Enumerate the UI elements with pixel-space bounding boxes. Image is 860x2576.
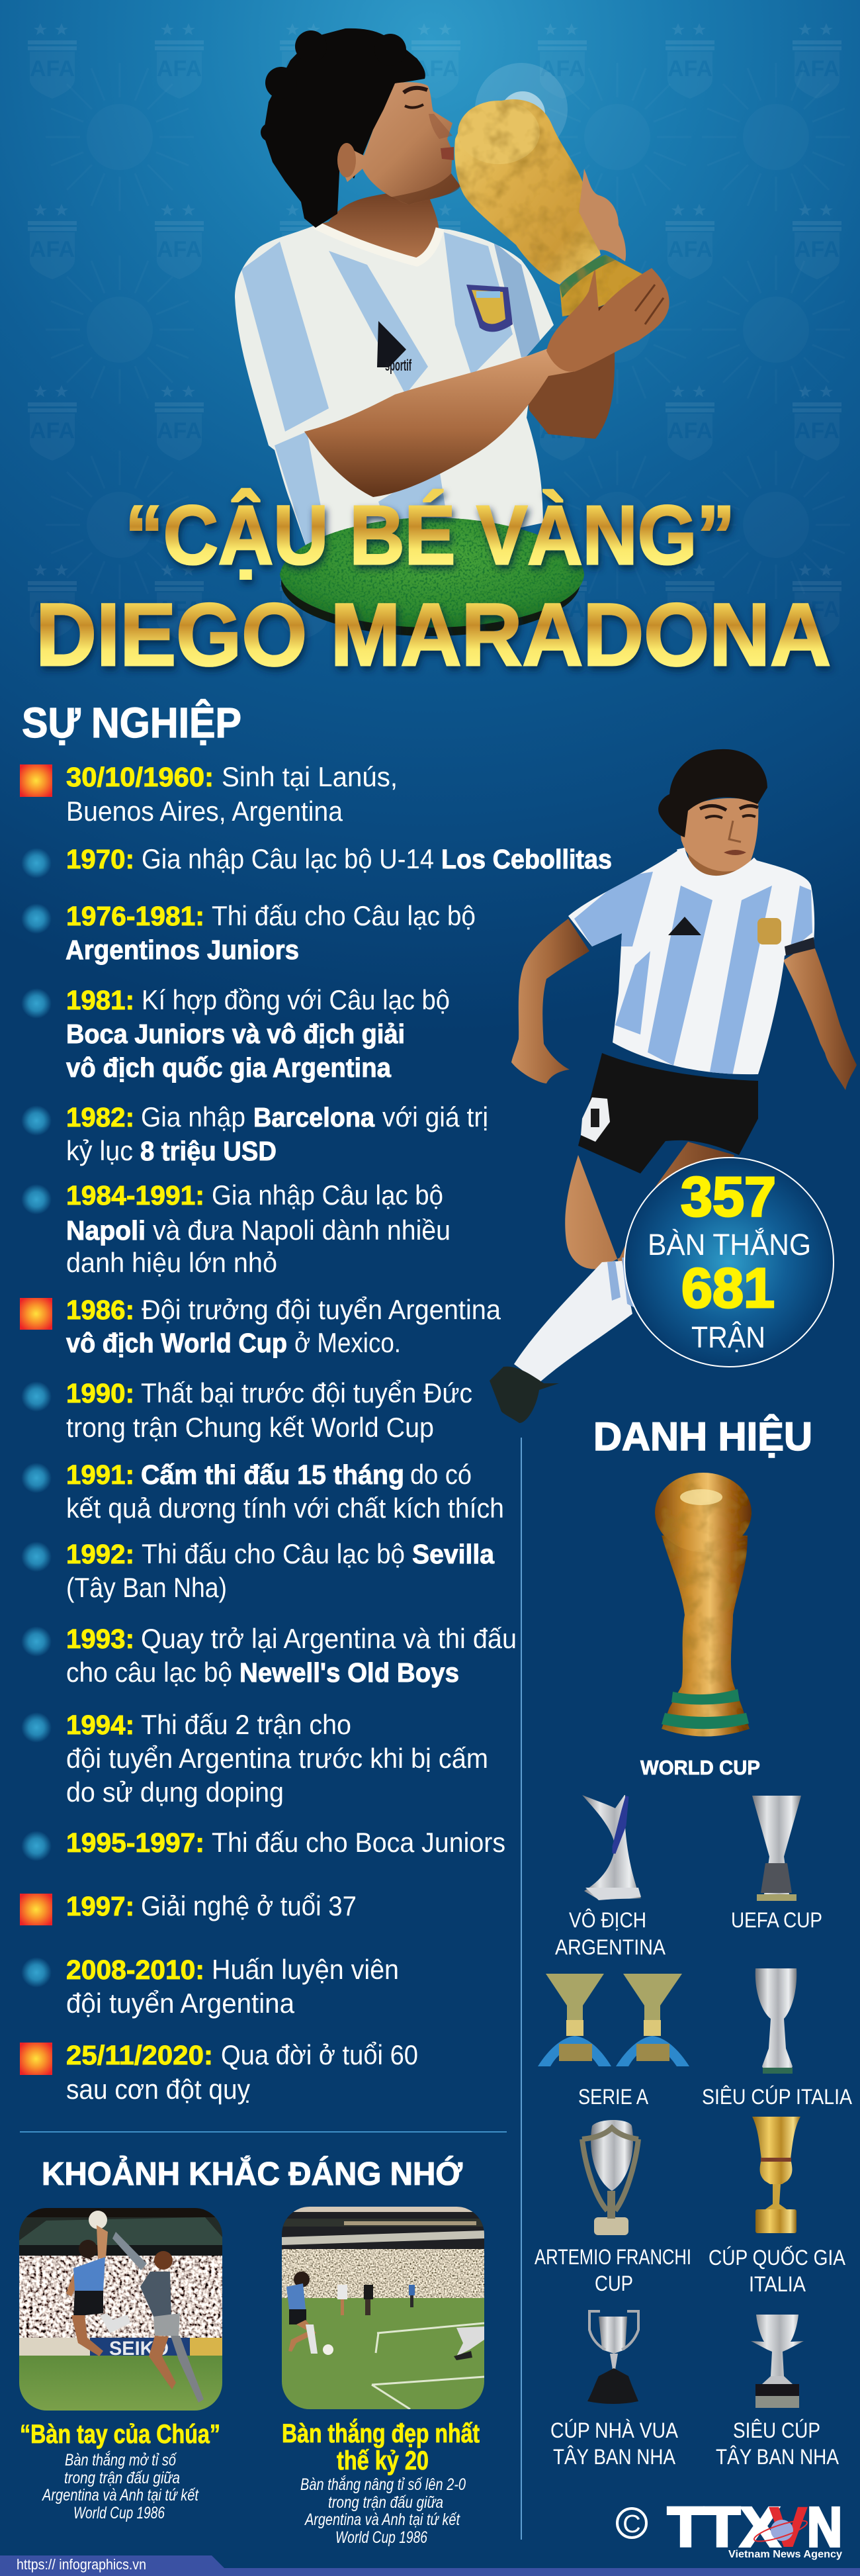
entry 1986: ở Mexico. [294, 1327, 401, 1358]
entry 1984-1991: Gia nhập Câu lạc bộ [212, 1179, 443, 1211]
entry 1995-1997 [21, 1827, 505, 1861]
entry 2020: Qua đời ở tuổi 60 [221, 2039, 418, 2070]
thigh and knee [565, 1142, 734, 1271]
entry 1982: 1982: [66, 1102, 134, 1132]
label: Artemio Franchi Cup [535, 2245, 691, 2295]
entry 1982: 8 triệu USD [140, 1136, 277, 1166]
photo: Goal of the Century [282, 2207, 484, 2409]
hand [546, 268, 669, 372]
entry 1992: Sevilla [412, 1539, 495, 1569]
entry 1970: 1970: [66, 844, 134, 874]
caption: Goal of the Century: Bàn thắng đẹp nhất [282, 2418, 480, 2448]
entry 2008-2010: Huấn luyện viên [212, 1954, 399, 1985]
entry 1993 [21, 1623, 517, 1688]
entry 1986: Đội trưởng đội tuyển Argentina [142, 1294, 501, 1325]
entry 1981: Kí hợp đồng với Câu lạc bộ [142, 984, 450, 1015]
caption: Hand of God: trong trận đấu giữa [64, 2469, 180, 2487]
entry 1994 [21, 1709, 488, 1808]
entry 1960: 30/10/1960: [66, 762, 214, 792]
entry 1976-1981: Thi đấu cho Câu lạc bộ [212, 900, 476, 931]
title: “CẬU BÉ VÀNG” [125, 488, 735, 582]
label: Artemio Franchi Cup: CUP [595, 2272, 633, 2295]
caption: Hand of God [20, 2420, 220, 2522]
le coq logo: sportif [385, 357, 412, 375]
trophy: UEFA Cup [752, 1796, 801, 1901]
face [678, 798, 758, 890]
caption: Goal of the Century: World Cup 1986 [335, 2528, 427, 2547]
trophy: Siêu cúp Italia [755, 1968, 796, 2074]
jersey [235, 225, 554, 549]
far arm [523, 351, 615, 439]
label: Siêu cúp Tây Ban Nha: TÂY BAN NHA [716, 2445, 839, 2469]
entry 1960: Buenos Aires, Argentina [66, 796, 343, 827]
entry 1995-1997: Thi đấu cho Boca Juniors [212, 1827, 505, 1858]
upper fingers [579, 169, 626, 261]
photo: Hand of God [19, 2208, 222, 2411]
entry 1995-1997: 1995-1997: [66, 1827, 204, 1858]
caption: Hand of God: World Cup 1986 [73, 2504, 165, 2522]
entry 1981: vô địch quốc gia Argentina [66, 1052, 392, 1083]
label: Siêu cúp Tây Ban Nha: SIÊU CÚP [733, 2418, 820, 2442]
entry 1997: Giải nghệ ở tuổi 37 [141, 1890, 357, 1921]
label: World Cup: WORLD CUP [640, 1756, 760, 1779]
logo: TTXVN: Vietnam News Agency [728, 2549, 842, 2560]
trophy: Cúp quốc gia Italia [752, 2117, 800, 2233]
entry 1986 [20, 1294, 501, 1358]
title [36, 488, 831, 684]
entry 1990: 1990: [66, 1378, 134, 1408]
goalkeeper [112, 2232, 204, 2403]
label: Artemio Franchi Cup: ARTEMIO FRANCHI [535, 2245, 691, 2269]
entry 1984-1991: Napoli [66, 1215, 146, 1246]
trophies: Serie A [538, 1974, 689, 2066]
ball [323, 2344, 333, 2355]
logo: TTXVN: TTX [667, 2496, 780, 2558]
face [337, 82, 460, 205]
goalkeeper on the ground [454, 2326, 484, 2360]
pitch lines [372, 2323, 484, 2409]
label: Vô địch Argentina: ARGENTINA [555, 1935, 666, 1959]
entry 1986: 1986: [66, 1295, 134, 1325]
entry 1992: Thi đấu cho Câu lạc bộ [142, 1538, 405, 1569]
hair [658, 749, 767, 837]
left arm [511, 919, 589, 1083]
entry 1992: (Tây Ban Nha) [66, 1572, 227, 1603]
entry 1970: Gia nhập Câu lạc bộ U-14 [142, 843, 434, 874]
entry 1970: Los Cebollitas [441, 844, 612, 874]
entry 1991: 1991: [66, 1459, 134, 1490]
stats circle [624, 1158, 834, 1367]
logo: TTXVN [617, 2496, 842, 2560]
entry 1997: 1997: [66, 1891, 134, 1921]
entry 1982: kỷ lục [66, 1135, 133, 1166]
entry 1984-1991: và đưa Napoli dành nhiều [153, 1215, 451, 1246]
entry 1993: Newell's Old Boys [239, 1657, 459, 1688]
label: Vô địch Argentina: VÔ ĐỊCH [569, 1908, 646, 1932]
nose shadow [429, 114, 452, 139]
entry 1990 [21, 1377, 472, 1443]
entry 1991 [21, 1459, 504, 1524]
entry 1984-1991: 1984-1991: [66, 1180, 204, 1211]
entry 1976-1981: 1976-1981: [66, 901, 204, 931]
trophy: Siêu cúp Tây Ban Nha [751, 2315, 804, 2408]
running Maradona photo [490, 749, 857, 1423]
label: Cúp quốc gia Italia [709, 2246, 846, 2296]
caption: Hand of God: “Bàn tay của Chúa” [20, 2420, 220, 2449]
stat: matches: 681 [681, 1257, 775, 1319]
footer bar with URL: https:// infographics.vn [17, 2556, 146, 2573]
caption: Hand of God: Argentina và Anh tại tứ kết [41, 2486, 199, 2505]
entry 1986: vô địch World Cup [66, 1328, 287, 1358]
photo: Hand of God: SEIKO [109, 2338, 169, 2360]
stats circle: TRẬN [691, 1320, 765, 1354]
caption: Hand of God: Bàn thắng mở tỉ số [65, 2450, 177, 2469]
boot [490, 1367, 559, 1423]
entry 1990: trong trận Chung kết World Cup [66, 1412, 434, 1443]
logo: TTXVN: V [769, 2496, 807, 2558]
label: Cúp Nhà Vua [550, 2418, 679, 2469]
timeline: career entries [20, 761, 612, 2105]
ball [89, 2211, 107, 2229]
entry 1997 [20, 1890, 357, 1925]
lips [441, 147, 454, 160]
entry 1991: kết quả dương tính với chất kích thích [66, 1493, 504, 1524]
entry 1981 [21, 984, 450, 1083]
entry 1994: Thi đấu 2 trận cho [141, 1709, 351, 1740]
label: Cúp quốc gia Italia: CÚP QUỐC GIA [709, 2246, 846, 2270]
ear [337, 143, 356, 177]
copyright mark [617, 2508, 646, 2538]
heading: memorable moments: KHOẢNH KHẮC ĐÁNG NHỚ [42, 2156, 462, 2192]
main photo: Maradona kissing the World Cup [235, 28, 669, 549]
heading: career: SỰ NGHIỆP [22, 698, 241, 747]
entry 1982: Gia nhập [141, 1101, 245, 1132]
distant players [337, 2285, 415, 2315]
sock [514, 1258, 634, 1383]
eyebrow and closed eye [404, 88, 427, 93]
label: Cúp Nhà Vua: TÂY BAN NHA [553, 2445, 676, 2469]
entry 1993: Quay trở lại Argentina và thi đấu [141, 1623, 517, 1654]
lens flare above trophy [475, 63, 568, 156]
entry 1991: do có [410, 1459, 472, 1490]
label: Serie A: SERIE A [578, 2085, 649, 2109]
right arm [783, 942, 857, 1090]
entry 1991: Cấm thi đấu 15 tháng [141, 1459, 404, 1490]
entry 2008-2010 [21, 1954, 399, 2019]
trophy: Vô địch Argentina [582, 1795, 641, 1900]
entry 1981: Boca Juniors và vô địch giải [66, 1019, 405, 1049]
neck [316, 185, 439, 262]
trophy: Cúp Nhà Vua [587, 2311, 638, 2404]
logo: TTXVN: N [807, 2496, 842, 2558]
label: UEFA Cup: UEFA CUP [731, 1908, 822, 1932]
entry 1984-1991 [21, 1179, 451, 1278]
caption: Goal of the Century: trong trận đấu giữa [328, 2493, 443, 2512]
caption: Goal of the Century [282, 2418, 480, 2547]
entry 1982: với giá trị [382, 1101, 488, 1132]
entry 1976-1981 [21, 900, 476, 965]
entry 1982 [21, 1101, 488, 1166]
trophy: Artemio Franchi Cup [582, 2120, 638, 2235]
entry 2020: 25/11/2020: [66, 2040, 213, 2070]
entry 1994: đội tuyển Argentina trước khi bị cấm [66, 1743, 488, 1774]
trophy [454, 99, 644, 316]
label: Vô địch Argentina [555, 1908, 666, 1959]
entry 1960 [20, 761, 398, 827]
entry 1990: Thất bại trước đội tuyển Đức [141, 1377, 472, 1408]
entry 1981: 1981: [66, 985, 134, 1015]
entry 1993: cho câu lạc bộ [66, 1657, 232, 1688]
entry 1994: do sử dụng doping [66, 1776, 284, 1808]
caption: Goal of the Century: Argentina và Anh tại tứ kết [304, 2510, 460, 2529]
jaw shadow [390, 173, 460, 205]
copyright mark: C [623, 2510, 641, 2538]
entry 1970 [21, 843, 612, 878]
caption: Goal of the Century: Bàn thắng nâng tỉ số lên 2-0 [300, 2475, 466, 2494]
entry 1992 [21, 1538, 495, 1603]
entry 1982: Barcelona [253, 1102, 375, 1132]
hair [261, 28, 425, 228]
entry 1994: 1994: [66, 1710, 134, 1740]
le coq logo [377, 321, 412, 375]
label: Siêu cúp Tây Ban Nha [716, 2418, 839, 2469]
background pattern: AFA crests and suns [28, 23, 850, 639]
trophy base underside [566, 276, 644, 316]
Maradona in the air [66, 2225, 130, 2356]
entry 2020 [20, 2039, 418, 2105]
title: DIEGO MARADONA [36, 586, 831, 684]
entry 2008-2010: 2008-2010: [66, 1955, 204, 1985]
crest on jersey [466, 285, 513, 332]
stats circle: BÀN THẮNG [648, 1228, 811, 1262]
stat: goals: 357 [681, 1166, 776, 1228]
jersey [568, 849, 815, 1079]
heading: titles: DANH HIỆU [593, 1414, 812, 1459]
front arm [304, 348, 576, 497]
shorts number patch [581, 1097, 610, 1142]
entry 1984-1991: danh hiệu lớn nhỏ [66, 1247, 277, 1278]
entry 1960: Sinh tại Lanús, [222, 761, 398, 792]
label: Cúp Nhà Vua: CÚP NHÀ VUA [550, 2418, 679, 2442]
label: Cúp quốc gia Italia: ITALIA [749, 2272, 806, 2296]
entry 1992: 1992: [66, 1539, 134, 1569]
entry 2020: sau cơn đột quỵ [66, 2074, 250, 2105]
Maradona dribbling [286, 2272, 318, 2354]
entry 2008-2010: đội tuyển Argentina [66, 1988, 295, 2019]
footer bar with URL [0, 2555, 860, 2576]
entry 1976-1981: Argentinos Juniors [65, 935, 299, 965]
shorts [578, 1053, 758, 1173]
caption: Goal of the Century: thế kỷ 20 [337, 2446, 429, 2475]
trophy: World Cup [655, 1473, 752, 1737]
grass mound [280, 518, 584, 636]
entry 1993: 1993: [66, 1624, 134, 1654]
